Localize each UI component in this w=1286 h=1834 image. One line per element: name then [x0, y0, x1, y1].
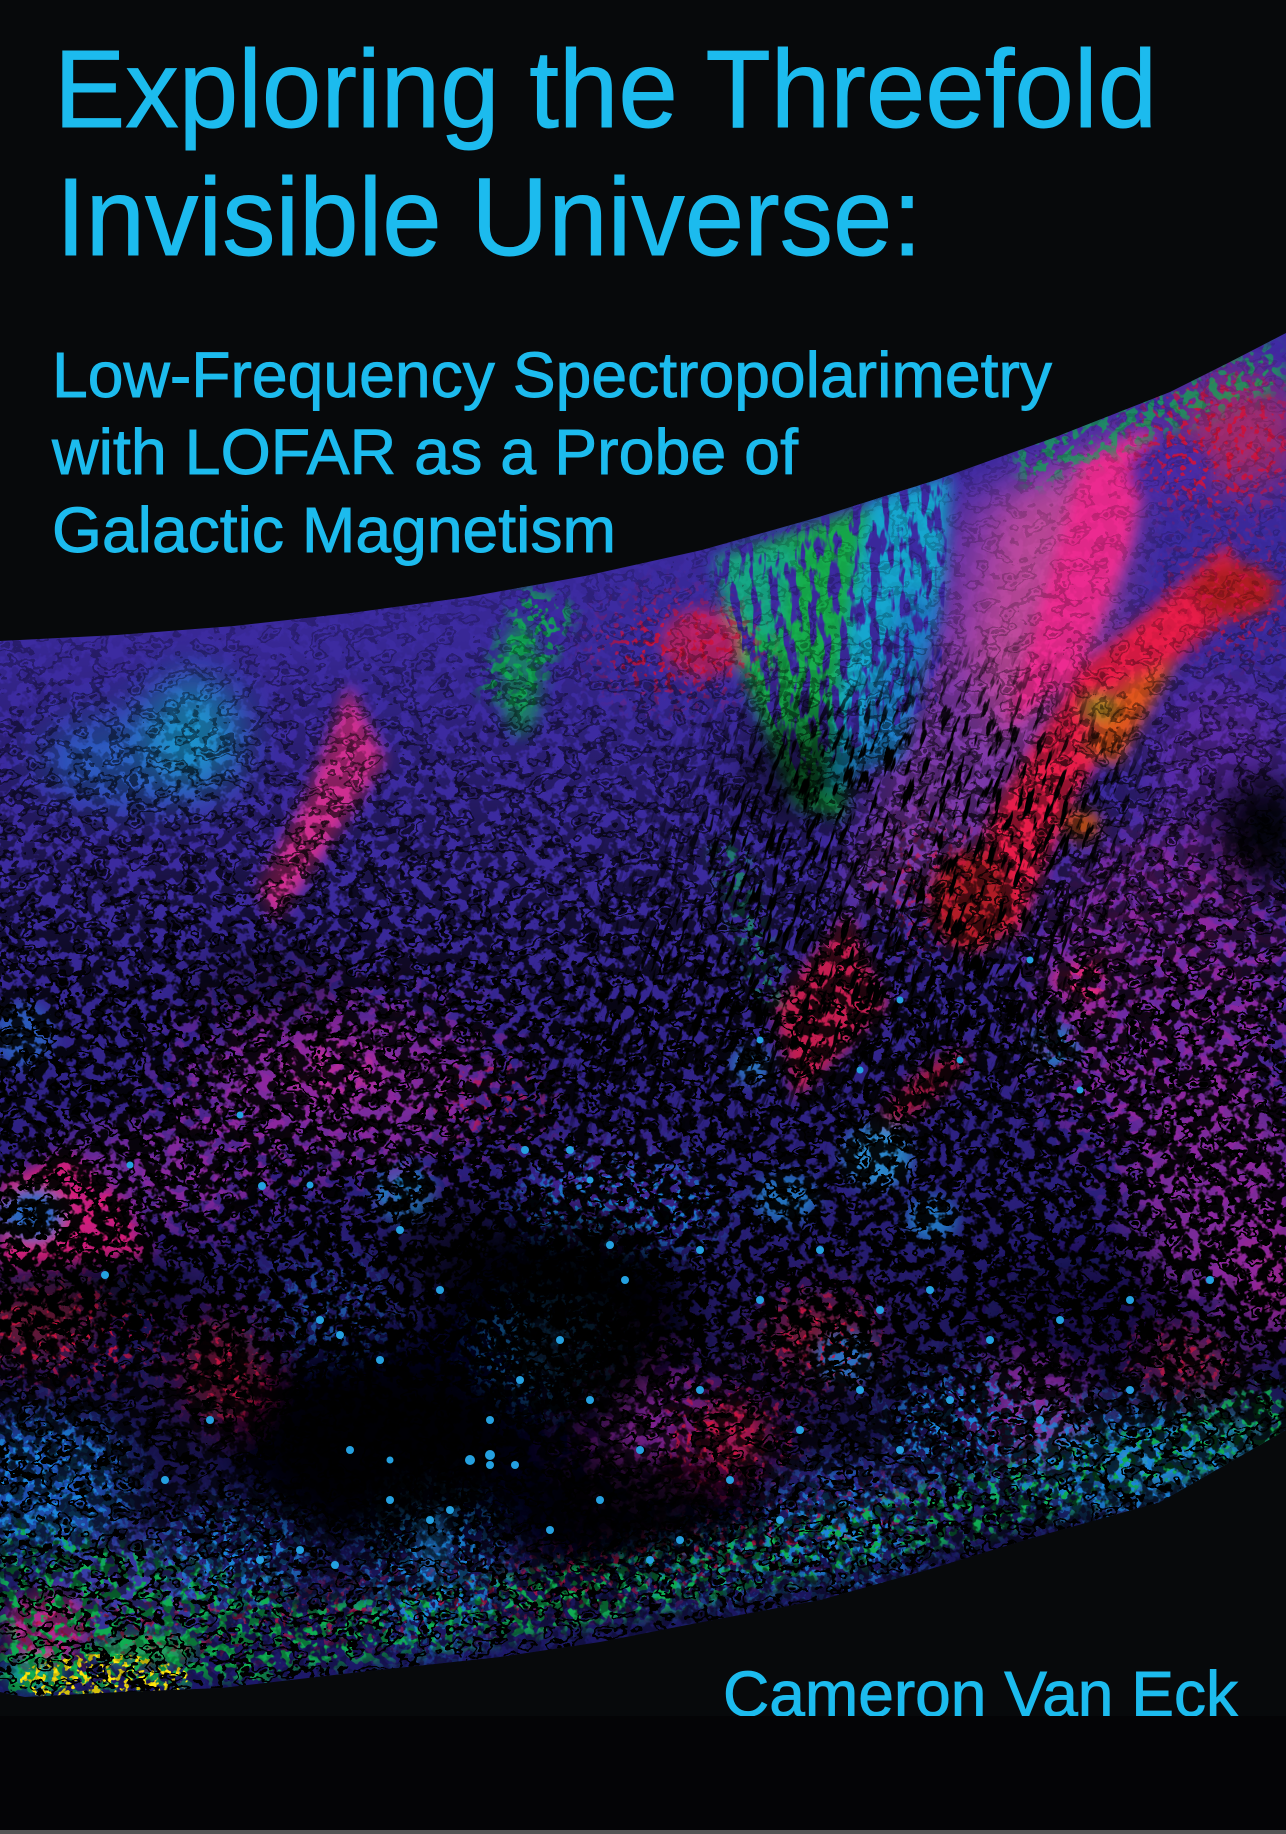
top edge red speckle patch [661, 608, 743, 679]
map base colour [0, 320, 1286, 1720]
green texture [0, 320, 1286, 1720]
purple to pink fan upper right [842, 421, 1152, 913]
subtitle: with LOFAR as a Probe of [51, 416, 798, 488]
map colour regions [0, 374, 1286, 1689]
title [54, 28, 1157, 279]
broad dark shading [12, 725, 1286, 1556]
blue texture [0, 320, 1286, 1720]
red lower [772, 913, 889, 1100]
pink band left [0, 1152, 152, 1269]
subtitle [51, 339, 1052, 566]
title: Invisible Universe: [56, 156, 922, 279]
magenta texture [0, 320, 1286, 1720]
dark region centre-bottom [433, 1217, 690, 1427]
author: Cameron Van Eck [723, 1658, 1239, 1730]
dark reds [181, 1316, 263, 1422]
title: Exploring the Threefold [54, 28, 1157, 151]
compact sources [101, 956, 1214, 1569]
magenta streak upper left [257, 684, 386, 924]
cyan-blue patch upper left [41, 714, 240, 807]
subtitle: Low-Frequency Spectropolarimetry [52, 339, 1052, 411]
black blotches [0, 320, 1286, 1720]
green streak patch [712, 501, 878, 826]
red texture [0, 320, 1286, 1720]
purple mid band [199, 1012, 480, 1152]
lower left blue [0, 1422, 123, 1550]
black vein texture [0, 320, 1286, 1720]
yellow texture lower-left [0, 1560, 500, 1720]
pink and red stream upper right [1006, 427, 1152, 725]
orange patches [1081, 694, 1119, 722]
bottom grey edge [0, 1830, 1286, 1834]
lower dark band [0, 1716, 1286, 1830]
panel: sky map image [0, 333, 1286, 1697]
lower-left corner colours [6, 1591, 88, 1661]
blue cluster blobs [842, 1123, 913, 1189]
subtitle: Galactic Magnetism [52, 494, 616, 566]
indigo flecks over green patch [600, 400, 1286, 900]
